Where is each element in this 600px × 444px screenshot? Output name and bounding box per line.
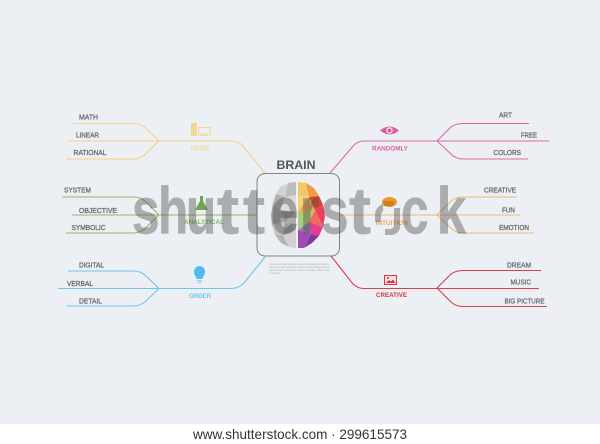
items: intuition	[484, 188, 529, 232]
text block: caption: eiusmod tempor incididunt ut labore et dolore magna aliqua ut	[269, 266, 330, 269]
watermark: shu	[132, 175, 216, 248]
icon: speech bubble	[382, 197, 397, 207]
items: intuition: EMOTION	[499, 225, 529, 232]
items: analytical: OBJECTIVE	[79, 208, 117, 215]
items: order	[67, 262, 104, 306]
items: logic: MATH	[79, 114, 98, 122]
left hemisphere	[271, 182, 296, 248]
branch: logic	[66, 114, 265, 173]
watermark: c	[401, 175, 429, 248]
items: logic: LINEAR	[76, 132, 99, 140]
icon: flask	[195, 196, 208, 210]
branch: analytical	[62, 188, 257, 233]
items: analytical: SYSTEM	[64, 188, 91, 194]
footer text: www.shutterstock.com · 299615573	[192, 426, 407, 442]
items: creative	[504, 262, 545, 306]
items: randomly: COLORS	[494, 150, 521, 157]
items: randomly	[494, 112, 537, 157]
items: analytical: SYMBOLIC	[72, 225, 106, 232]
items: intuition: FUN	[502, 208, 515, 214]
icon: eye	[380, 126, 399, 134]
title: BRAIN	[276, 160, 316, 172]
watermark: t	[349, 174, 371, 248]
items: randomly: ART	[499, 112, 513, 120]
label: order: ORDER	[189, 293, 211, 300]
label: randomly: RANDOMLY	[372, 146, 409, 152]
branch: creative	[331, 256, 547, 306]
icon: light bulb	[194, 266, 205, 283]
items: creative: MUSIC	[510, 280, 531, 286]
brain illustration	[271, 182, 325, 248]
branch: order	[58, 257, 265, 306]
items: order: DIGITAL	[79, 262, 104, 270]
items: order: DETAIL	[79, 298, 102, 306]
watermark: tt	[217, 174, 265, 248]
label: creative: CREATIVE	[376, 292, 408, 299]
items: order: VERBAL	[67, 281, 93, 288]
items: creative: DREAM	[507, 262, 531, 270]
watermark	[132, 174, 467, 248]
label: logic: LOGIC	[191, 145, 210, 152]
icon: picture	[384, 276, 396, 284]
watermark: ers	[271, 175, 349, 248]
label: analytical: ANALYTICAL	[184, 219, 224, 226]
items: intuition: CREATIVE	[484, 188, 516, 194]
icon: computer	[191, 123, 210, 136]
items: creative: BIG PICTURE	[504, 298, 545, 306]
items: logic	[74, 114, 107, 157]
label: intuition: INTUITION	[376, 220, 408, 227]
items: randomly: FREE	[521, 132, 537, 140]
branch: randomly	[330, 112, 549, 173]
text block: caption: ris nisi aliqu	[269, 272, 281, 275]
panel: brain frame	[257, 174, 340, 256]
text block: caption: Lorem ipsum dolor sit amet consectetur adipiscing elit sed do	[269, 263, 330, 266]
watermark: k	[437, 174, 467, 248]
right hemisphere	[298, 182, 325, 248]
text block: caption: enim ad minim veniam quis nostrud exercitation ullamco labo	[269, 269, 330, 272]
branch: intuition	[339, 188, 534, 233]
footer band	[0, 424, 600, 444]
items: logic: RATIONAL	[74, 150, 107, 157]
items: analytical	[64, 188, 117, 232]
text block: caption	[269, 263, 330, 275]
